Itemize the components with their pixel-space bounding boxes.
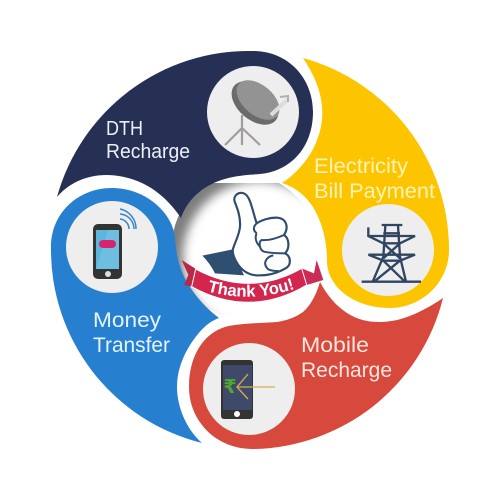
- thumbs up hand: [233, 193, 290, 275]
- panel: Electricity Bill Payment: [282, 58, 449, 308]
- panel: DTH Recharge: [57, 51, 313, 218]
- sleeve: [202, 249, 244, 275]
- label: Electricity Bill Payment: Electricity: [314, 155, 409, 178]
- label: Money Transfer: Transfer: [93, 334, 170, 357]
- label: DTH Recharge: DTH: [106, 118, 143, 140]
- icon: phone with rupee: [203, 343, 295, 435]
- ribbon band: [192, 268, 307, 302]
- ribbon path for text: [201, 287, 301, 297]
- icon: satellite dish: [207, 66, 299, 158]
- label: Mobile Recharge: Recharge: [301, 359, 392, 382]
- label: Electricity Bill Payment: Bill Payment: [314, 180, 435, 203]
- ribbon ears: [182, 260, 196, 287]
- panel: Mobile Recharge: [189, 282, 443, 449]
- icon: phone with wifi: [66, 201, 158, 293]
- icon: phone with rupee: ₹: [223, 376, 237, 398]
- finger lines: [254, 223, 285, 271]
- label: Money Transfer: Money: [93, 309, 162, 332]
- icon: thumbs up with Thank You ribbon: [182, 192, 324, 302]
- ribbon text: Thank You!: [210, 278, 294, 297]
- label: Mobile Recharge: Mobile: [301, 334, 369, 357]
- infographic wheel: [50, 51, 449, 449]
- center: white disc with inner shadow: [174, 183, 301, 314]
- icon: transmission tower: [342, 204, 434, 296]
- label: DTH Recharge: Recharge: [106, 141, 190, 163]
- panel: Money Transfer: [51, 188, 219, 443]
